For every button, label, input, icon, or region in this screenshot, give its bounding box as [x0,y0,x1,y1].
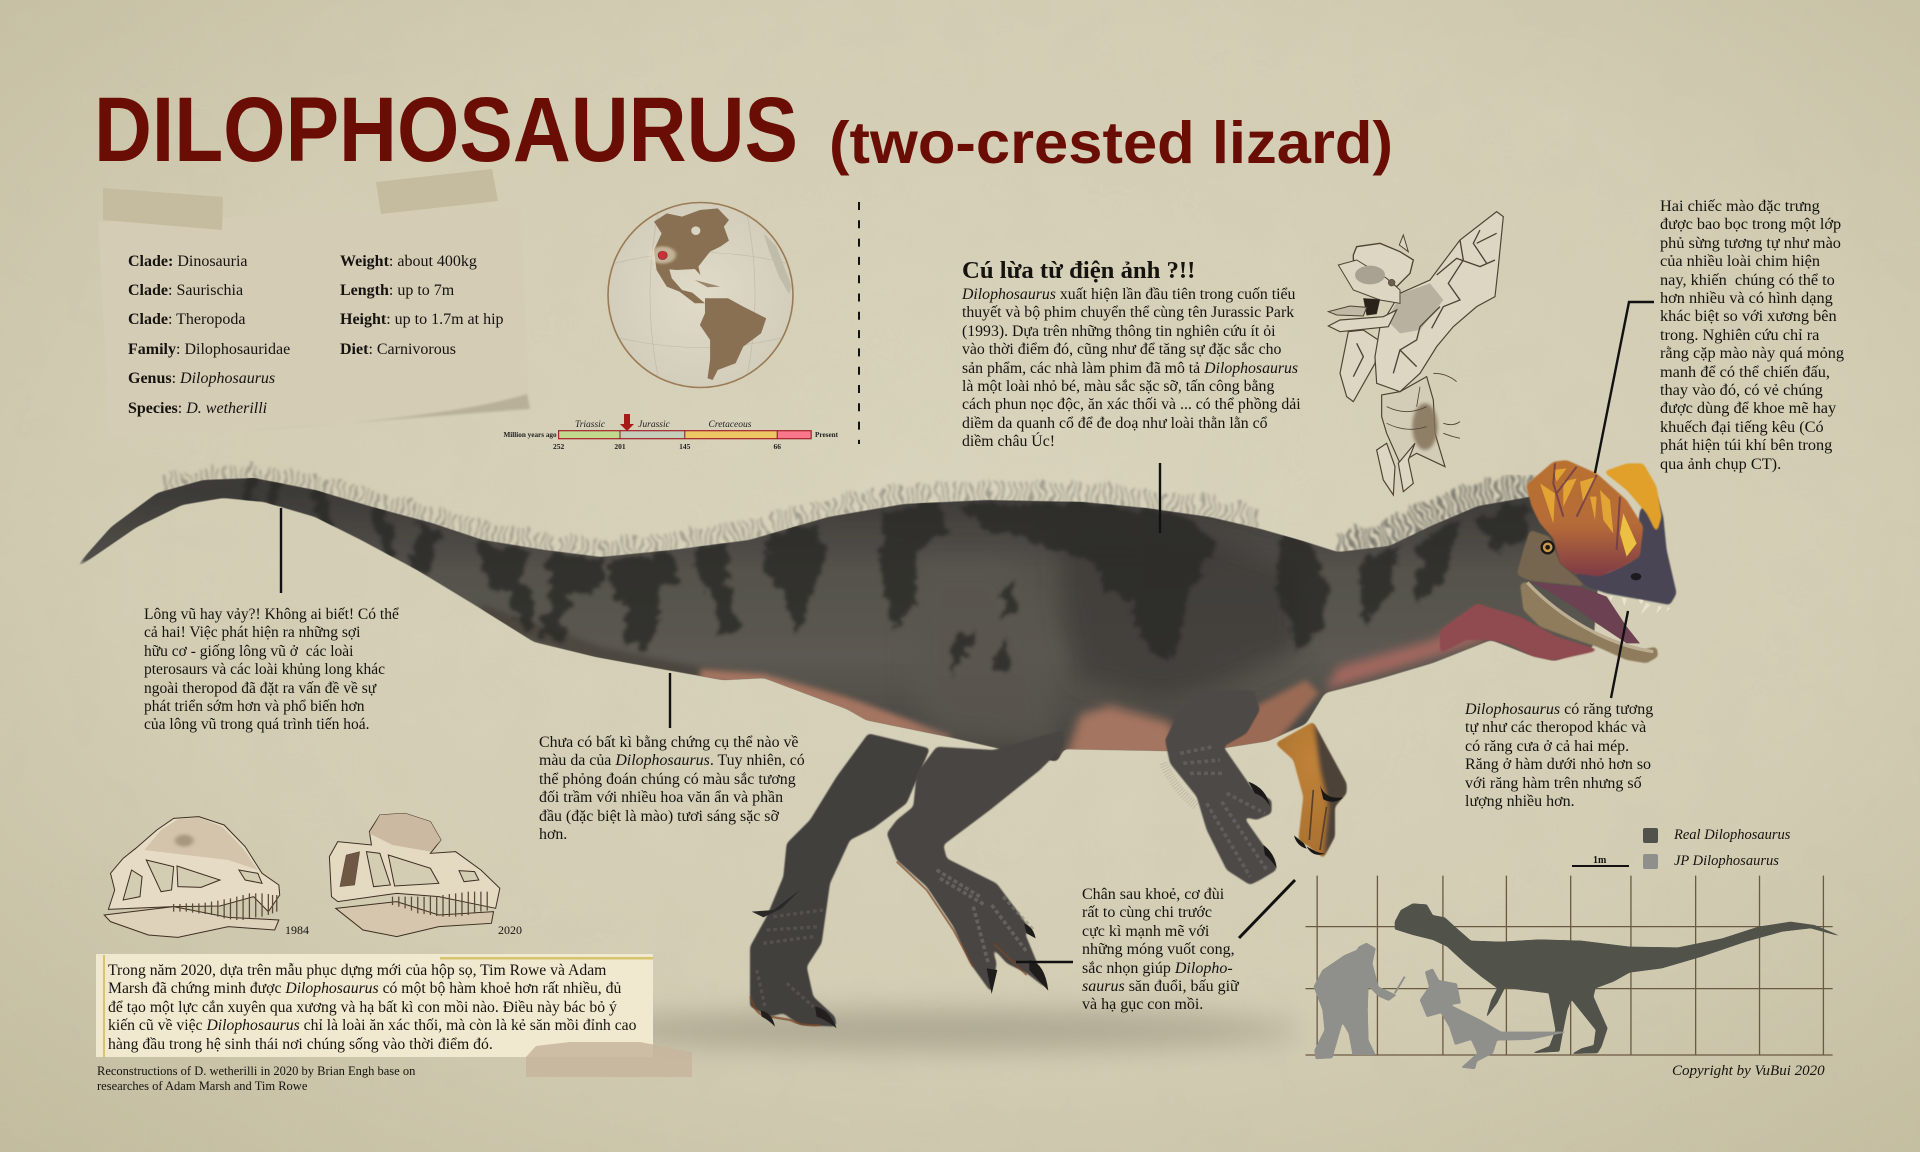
text: legs and claws: Chân sau khoẻ, cơ đùi [1082,886,1224,903]
reddish smudge under callout [526,1042,692,1077]
arrow: timeline marker [620,414,634,431]
caption: reconstruction credit: Reconstructions of D. wetherilli in 2020 by Brian Engh base on [97,1064,415,1078]
text: teeth: có răng cưa ở cả hai mép. [1465,738,1629,755]
legend: real dilophosaurus: Real Dilophosaurus [1674,827,1790,843]
text: skin colour: thể phỏng đoán chúng có màu sắc tương [539,771,796,788]
head [1440,460,1677,663]
physical stats list [340,252,504,358]
geological timeline: Triassic [575,420,606,430]
text: skull label 2020: 2020 [498,923,522,937]
text: legs and claws: và hạ gục con mồi. [1082,996,1203,1013]
text: crests: được dùng để khoe mẽ hay [1660,398,1836,417]
physical stats list: Height: up to 1.7m at hip [340,311,504,328]
text: 2020 research callout: hàng đầu trong hệ sinh thái nơi chúng sống vào thời điểm đó. [108,1036,493,1053]
text: movie myth [962,286,1301,450]
text: movie myth: sản phẩm, các nhà làm phim đã mô tả Dilophosaurus [962,360,1298,377]
body and tail [70,478,1600,762]
text: feathers or scales: ngoài theropod đã đặt ra vấn đề về sự [144,680,376,697]
text: crests: hơn nhiều và có hình dạng [1660,288,1833,307]
title [94,79,1393,181]
text: 2020 research callout: Marsh đã chứng minh được Dilophosaurus có một bộ hàm khoẻ hơn rất nhiều, đủ [108,980,621,997]
text: crests [1660,196,1844,473]
physical stats list: Weight: about 400kg [340,252,477,270]
text: skin colour: hơn. [539,826,567,843]
silhouette: real dilophosaurus [1395,903,1845,1054]
text: crests: khuếch đại tiếng kêu (Có [1660,417,1824,436]
taxonomy list: Clade: Saurischia [128,282,243,299]
size comparison chart [1305,876,1845,1069]
text: skin colour [539,734,805,843]
text: legs and claws: cực kì mạnh mẽ với [1082,923,1209,940]
text: teeth: với răng hàm trên nhưng số [1465,775,1642,792]
title: DILOPHOSAURUS [94,79,798,181]
geological timeline: 145 [679,442,691,451]
legend swatches [1572,828,1658,869]
taxonomy list: Genus: Dilophosaurus [128,370,275,387]
geological timeline: Present [815,431,839,439]
feather fringe [165,476,1261,552]
icon: ground shadow [580,1010,1300,1050]
text: movie myth: Dilophosaurus xuất hiện lần đầu tiên trong cuốn tiểu [962,286,1295,303]
text: feathers or scales: Lông vũ hay vảy?! Không ai biết! Có thể [144,606,399,623]
taxonomy list: Clade: Dinosauria [128,252,248,270]
taxonomy list [128,252,290,417]
skull 2020 [329,813,500,937]
dashed divider [858,202,860,444]
text: teeth [1464,701,1653,810]
scale label: 1m [1593,855,1606,866]
text: crests: phát hiện túi khí bên trong [1660,435,1832,454]
globe map [608,202,793,388]
heading: movie myth: Cú lừa từ điện ảnh ?!! [962,257,1195,284]
physical stats list: Diet: Carnivorous [340,341,456,358]
legend: JP dilophosaurus: JP Dilophosaurus [1674,853,1779,869]
text: crests: Hai chiếc mào đặc trưng [1660,196,1820,215]
text: movie myth: (1993). Dựa trên những thông tin nghiên cứu ít ỏi [962,323,1276,340]
taxonomy list: Clade: Theropoda [128,311,245,328]
text: teeth: tự như các theropod khác và [1465,719,1646,736]
silhouette: JP dilophosaurus [1420,968,1569,1069]
text: crests: nay, khiến chúng có thể to [1660,270,1835,289]
geological timeline [504,414,839,451]
far hind leg [750,733,930,1028]
text: crests: qua ảnh chụp CT). [1660,454,1781,473]
crest [1526,460,1643,577]
text: crests: của nhiều loài chim hiện [1660,251,1820,270]
text: crests: thay vào đó, có vẻ chúng [1660,380,1823,399]
text: movie myth: diềm da quanh cổ để đe doạ như loài thằn lằn cổ [962,415,1268,432]
text: legs and claws: sắc nhọn giúp Dilopho- [1082,960,1233,977]
dinosaur illustration [70,460,1677,1028]
text: crests: được bao bọc trong một lớp [1660,214,1841,233]
text: skin colour: Chưa có bất kì bằng chứng cụ thể nào về [539,734,798,751]
text: feathers or scales: phát triển sớm hơn và phổ biến hơn [144,698,364,715]
geological timeline: Million years ago [504,431,557,439]
text: 2020 research callout [108,962,636,1053]
text: skin colour: đối trầm với nhiều hoa văn ẩn và phần [539,789,783,806]
text: 2020 research callout: kiến cũ về việc Dilophosaurus chỉ là loài ăn xác thối, mà còn là kẻ săn mồi đỉnh cao [108,1017,636,1034]
text: 2020 research callout: để tạo một lực cắn xuyên qua xương và hạ bất kì con mồi nào. Điều này bác bỏ ý [108,999,617,1016]
text: feathers or scales: cả hai! Việc phát hiện ra những sợi [144,624,360,641]
text: feathers or scales: pterosaurs và các loài khủng long khác [144,661,385,678]
far arm (orange) [1275,722,1347,858]
text: movie myth: diềm châu Úc! [962,433,1055,450]
text: crests: phủ sừng tương tự như mào [1660,233,1841,252]
taxonomy list: Species: D. wetherilli [128,400,267,417]
copyright: Copyright by VuBui 2020 [1672,1063,1825,1079]
text: feathers or scales: của lông vũ trong quá trình tiến hoá. [144,716,370,733]
title: (two-crested lizard) [829,110,1393,176]
text: 2020 research callout: Trong năm 2020, dựa trên mẫu phục dựng mới của hộp sọ, Tim Rowe và Adam [108,962,606,979]
text: feathers or scales: hữu cơ - giống lông vũ ở các loài [144,643,353,660]
text: teeth: lượng nhiều hơn. [1465,793,1575,810]
geological timeline: 252 [553,442,564,451]
text: skin colour: đầu (đặc biệt là mào) tươi sáng sặc sỡ [539,808,779,825]
JP dilophosaurus sketch [1328,212,1503,495]
skull 1984 [104,817,280,937]
geological timeline: 66 [773,442,781,451]
text: movie myth: cách phun nọc độc, ăn xác thối và ... có thể phồng dải [962,396,1301,413]
geological timeline: 201 [614,442,626,451]
text: movie myth: thuyết và bộ phim chuyển thể cùng tên Jurassic Park [962,304,1294,321]
physical stats list: Length: up to 7m [340,282,454,299]
silhouette: human [1314,943,1397,1059]
neck dewlap [1440,603,1600,661]
body patterns [243,478,1529,760]
text: legs and claws: saurus săn đuổi, bấu giữ [1082,978,1239,995]
text: legs and claws: những móng vuốt cong, [1082,941,1235,958]
leader lines [281,302,1654,962]
text: movie myth: vào thời điểm đó, cũng như để tăng sự đặc sắc cho [962,341,1281,358]
text: teeth: Dilophosaurus có răng tương [1465,701,1653,718]
text: teeth: Răng ở hàm dưới nhỏ hơn so [1465,756,1651,773]
note paper with tape [98,169,530,437]
text: crests: manh để có thể chiến đấu, [1660,362,1830,381]
caption: reconstruction credit [97,1064,416,1092]
text: skin colour: màu da của Dilophosaurus. Tuy nhiên, có [539,752,805,769]
geological timeline: Jurassic [638,420,671,430]
text: crests: rằng cặp mào này quá mỏng [1660,343,1844,362]
text: legs and claws: rất to cùng chi trước [1082,904,1212,921]
caption: reconstruction credit: researches of Adam Marsh and Tim Rowe [97,1078,307,1092]
taxonomy list: Family: Dilophosauridae [128,341,290,358]
text: movie myth: là một loài nhỏ bé, màu sắc sặc sỡ, tấn công bằng [962,378,1274,395]
near arm [1163,690,1277,885]
text: feathers or scales [144,606,399,733]
text: legs and claws [1082,886,1240,1013]
geological timeline: Cretaceous [709,420,752,430]
near hind leg [887,730,1063,994]
text: crests: khác biệt so với xương bên [1660,306,1837,325]
text: skull label 1984: 1984 [285,923,309,937]
text: crests: trong. Nghiên cứu chỉ ra [1660,325,1819,344]
callout box [96,954,653,1057]
